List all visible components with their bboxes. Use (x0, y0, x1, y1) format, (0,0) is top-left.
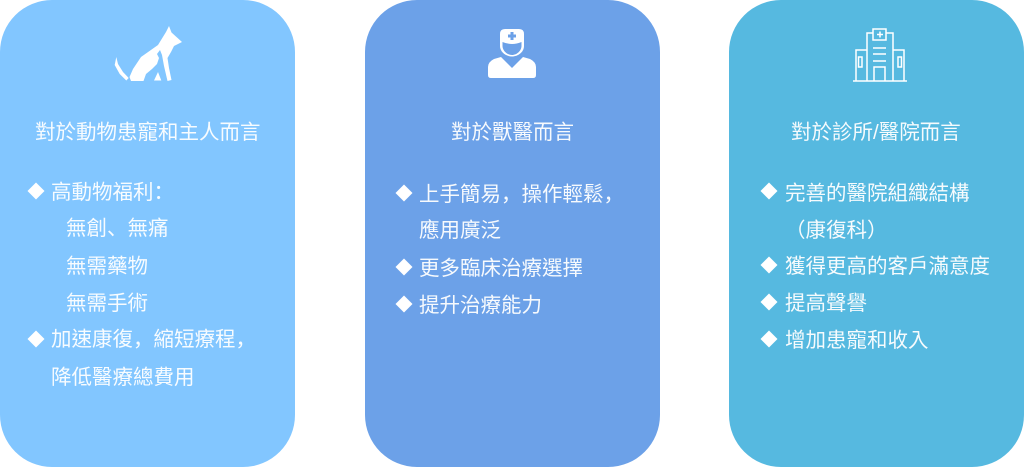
bullet list (760, 182, 990, 352)
heading: 對於動物患寵和主人而言 (35, 121, 260, 144)
panel: animals and owners (0, 0, 295, 467)
icon: doctor (488, 29, 536, 78)
bullet list (396, 177, 624, 317)
bullet list (28, 175, 256, 389)
bullet list: 上手簡易，操作輕鬆， (419, 177, 624, 207)
bullet list: 應用廣泛 (419, 219, 501, 242)
bullet list: 增加患寵和收入 (785, 329, 928, 352)
heading: 對於獸醫而言 (451, 121, 574, 144)
bullet list: 加速康復，縮短療程， (51, 322, 256, 352)
bullet list: （康復科） (785, 219, 888, 242)
bullet list: 完善的醫院組織結構 (785, 182, 970, 205)
bullet list: 獲得更高的客戶滿意度 (785, 255, 990, 278)
icon: hospital (853, 28, 907, 82)
icon: dog and cat (114, 26, 182, 81)
heading: 對於診所/醫院而言 (791, 121, 961, 144)
bullet list: 提高聲譽 (785, 292, 867, 315)
bullet list: 無需藥物 (66, 255, 148, 278)
bullet list: 更多臨床治療選擇 (419, 257, 583, 280)
bullet list: 提升治療能力 (419, 294, 542, 317)
bullet list: 無創、無痛 (66, 211, 168, 241)
bullet list: 高動物福利： (51, 175, 174, 205)
panel: clinics and hospitals (729, 0, 1024, 467)
panel: veterinarians (365, 0, 660, 467)
bullet list: 無需手術 (66, 292, 148, 315)
bullet list: 降低醫療總費用 (51, 366, 194, 389)
